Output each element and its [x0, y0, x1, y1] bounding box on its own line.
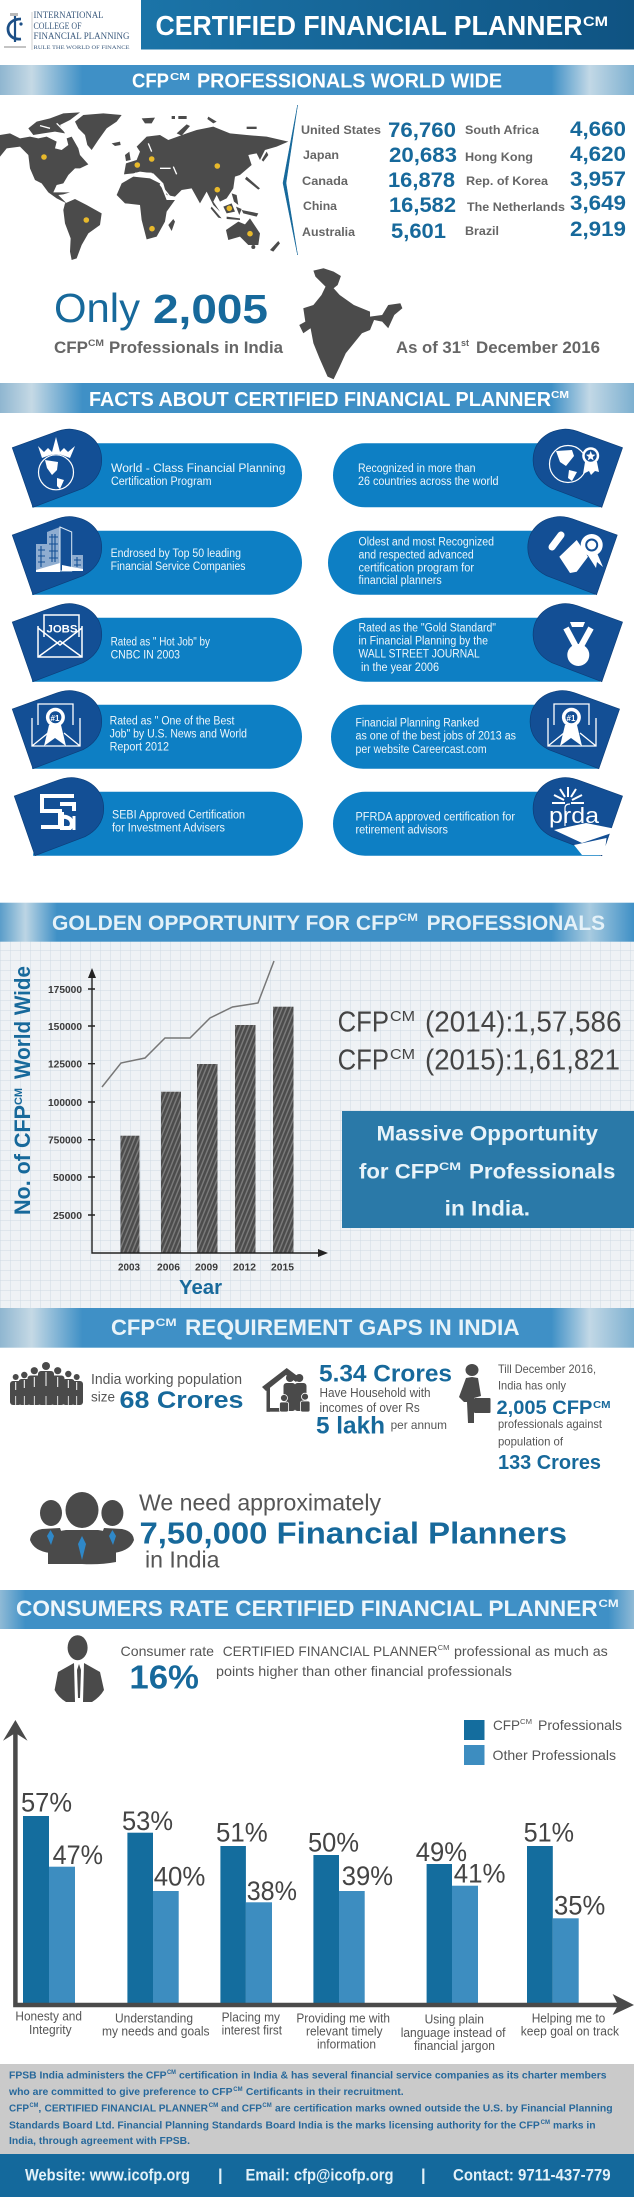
group: keep goal on track: 51%: [524, 1818, 574, 1848]
header banner with title: [141, 0, 634, 50]
stats: CFP counts 2014 and 2015: (2014):1,57,586: [425, 1007, 622, 1039]
x axis year labels: 2003: [118, 1262, 140, 1274]
bar chart: consumer ratings: [3, 1720, 634, 2053]
x axis year labels: [118, 1262, 294, 1274]
fact card: PFRDA approved: retirement advisors: [356, 825, 448, 837]
stat: India has only 2,005: India has only: [498, 1378, 566, 1392]
section heading: facts: [0, 383, 634, 413]
hatched bars: [120, 1007, 294, 1253]
panel: disclaimer text: CFP: [9, 2102, 29, 2114]
stat: household incomes: 5 lakh: [316, 1412, 385, 1439]
fact card: best job US News: [12, 691, 302, 769]
stat: India has only 2,005: 133 Crores: [498, 1452, 601, 1474]
fact card: gold standard: WALL STREET JOURNAL: [358, 649, 480, 661]
category labels: interest first: [222, 2023, 282, 2038]
panel: disclaimer text: CERTIFIED FINANCIAL PLANNER: [44, 2102, 208, 2114]
callout: massive opportunity: for CFP: [359, 1161, 439, 1184]
stat: household incomes: incomes of over Rs: [320, 1401, 420, 1415]
stat: household incomes: [316, 1361, 452, 1439]
left number column: 16,582: [389, 194, 456, 217]
panel: disclaimer text: India, through agreement with FPSB.: [9, 2135, 190, 2147]
fact card: SEBI approved: for Investment Advisers: [112, 823, 225, 835]
icon: envelope with number one rosette: #1: [566, 714, 576, 723]
group: plain language: 49%: [416, 1837, 467, 1867]
right number column: 3,649: [570, 192, 626, 215]
fact card: oldest and most recognized: [328, 517, 617, 595]
icon: envelope with number one rosette: [32, 704, 80, 746]
panel: disclaimer text: [0, 2064, 634, 2154]
left country column: Japan: [303, 148, 339, 162]
section heading: golden opportunity: GOLDEN OPPORTUNITY FOR CFP: [52, 911, 398, 935]
fact card: SEBI approved: [14, 778, 303, 856]
fact card: world class program: [12, 429, 302, 507]
right country column: [465, 123, 565, 238]
right country column: Rep. of Korea: [466, 174, 548, 188]
category labels: Integrity: [29, 2022, 72, 2037]
left country column: China: [303, 199, 337, 213]
icon: group of working people: [10, 1362, 83, 1405]
fact card: PFRDA approved: PFRDA approved certification for: [356, 811, 515, 823]
callout: only 2,005 in India: [54, 285, 600, 357]
left number column: [388, 119, 457, 243]
group: placing interest first: 38%: [247, 1876, 297, 1906]
x axis year labels: 2009: [195, 1262, 218, 1274]
right country column: Brazil: [465, 224, 499, 238]
legend: Professionals: [538, 1717, 622, 1733]
fact card: oldest and most recognized: certification program for: [358, 562, 474, 574]
callout: massive opportunity: CM: [439, 1161, 461, 1173]
y axis tick labels: 50000: [53, 1172, 82, 1184]
section heading: professionals world wide: CFP: [132, 70, 169, 92]
fact card: oldest and most recognized: Oldest and most Recognized: [358, 536, 494, 548]
category labels: Understanding: [115, 2011, 193, 2026]
category labels: relevant timely: [306, 2024, 383, 2039]
stat: India has only 2,005: Till December 2016,: [498, 1362, 596, 1376]
section heading: golden opportunity: PROFESSIONALS: [427, 911, 605, 935]
right number column: [570, 118, 626, 241]
y axis tick labels: 125000: [48, 1058, 82, 1070]
stat: India has only 2,005: population of: [498, 1434, 564, 1448]
legend: [464, 1717, 622, 1765]
y axis tick labels: 750000: [48, 1134, 82, 1146]
header banner with title: CERTIFIED FINANCIAL PLANNER: [156, 10, 583, 41]
section heading: facts: FACTS ABOUT CERTIFIED FINANCIAL PLANNER: [89, 389, 552, 411]
panel: disclaimer text: FPSB India administers the CFP: [9, 2069, 167, 2081]
callout: 7,50,000 financial planners needed: in India: [145, 1546, 220, 1572]
group: placing interest first: [216, 1818, 297, 2003]
callout: 7,50,000 financial planners needed: 7,50,000 Financial Planners: [140, 1515, 567, 1550]
group: understanding needs: [122, 1806, 205, 2003]
callout: massive opportunity: in India.: [445, 1198, 530, 1221]
section heading: golden opportunity: CM: [398, 912, 418, 924]
x axis year labels: 2006: [157, 1262, 180, 1274]
group: keep goal on track: [524, 1818, 605, 2003]
fact card: gold standard: in the year 2006: [361, 662, 439, 674]
fact card: best job US News: Job" by U.S. News and World: [110, 728, 247, 740]
category labels: financial jargon: [414, 2038, 495, 2053]
y axis title: World Wide: [10, 966, 35, 1079]
y axis title: [10, 966, 35, 1215]
x axis year labels: 2012: [233, 1262, 256, 1274]
icon: jobs envelope: JOBS: [46, 624, 78, 636]
stat: household incomes: Have Household with: [320, 1386, 431, 1400]
left country column: United States: [301, 123, 381, 137]
callout: only 2,005 in India: December 2016: [476, 338, 600, 357]
logo: International College of Financial Planning: COLLEGE OF: [34, 22, 82, 32]
legend: Other Professionals: [492, 1747, 616, 1763]
fact card: endorsed by top 50: [12, 517, 302, 595]
callout: only 2,005 in India: st: [461, 338, 469, 348]
footer: contact details: |: [218, 2167, 223, 2185]
section heading: requirement gaps: CM: [156, 1317, 177, 1329]
group: relevant information: 39%: [342, 1861, 393, 1891]
stat: India has only 2,005: professionals against: [498, 1417, 603, 1431]
group: keep goal on track: 35%: [554, 1890, 605, 1920]
y axis tick labels: 150000: [48, 1021, 82, 1033]
section heading: professionals world wide: CM: [170, 71, 190, 83]
section heading: facts: CM: [551, 389, 569, 401]
fact card: best job US News: Report 2012: [110, 742, 169, 754]
logo: International College of Financial Planning: RULE THE WORLD OF FINANCE: [34, 46, 130, 51]
stat: working population: India working population: [91, 1372, 242, 1388]
right country column: The Netherlands: [467, 200, 565, 214]
panel: disclaimer text: ,: [38, 2102, 41, 2114]
section heading: requirement gaps: REQUIREMENT GAPS IN INDIA: [185, 1315, 520, 1340]
fact card: endorsed by top 50: Financial Service Companies: [111, 561, 246, 573]
callout: only 2,005 in India: Only: [54, 285, 140, 331]
left country column: Australia: [302, 225, 355, 239]
y axis tick labels: [48, 984, 82, 1222]
callout: 7,50,000 financial planners needed: [139, 1490, 567, 1572]
panel: disclaimer text: Standards Board Ltd. Financial Planning Standards Board India is the marks licensing authority for the CFP: [9, 2119, 540, 2131]
panel: disclaimer text: CM: [167, 2070, 176, 2076]
fact card: best job US News: Rated as " One of the Best: [110, 715, 235, 727]
group: honesty and integrity: 47%: [53, 1840, 103, 1870]
group: plain language: 41%: [454, 1858, 506, 1888]
callout: only 2,005 in India: CFP: [54, 338, 88, 357]
axes: [15, 1730, 622, 2005]
stat: working population: 68 Crores: [120, 1387, 244, 1414]
fact card: oldest and most recognized: and respected advanced: [358, 549, 474, 561]
fact card: gold standard: in Financial Planning by the: [358, 636, 488, 648]
fact card: SEBI approved: SEBI Approved Certification: [112, 810, 245, 822]
icon: PFRDA logo with graduation cap: [549, 787, 621, 855]
panel: disclaimer text: CM: [262, 2103, 272, 2109]
left number column: 16,878: [388, 169, 455, 192]
footer: contact details: [0, 2154, 634, 2197]
icon: SEBI logo: [41, 796, 74, 830]
footer: contact details: |: [421, 2167, 426, 2185]
section heading: requirement gaps: [0, 1308, 634, 1348]
left number column: 20,683: [389, 144, 457, 167]
stats: CFP counts 2014 and 2015: (2015):1,61,821: [425, 1044, 620, 1076]
category labels: Placing my: [222, 2010, 280, 2025]
callout: only 2,005 in India: Professionals in India: [109, 338, 284, 357]
callout: only 2,005 in India: As of 31: [396, 338, 461, 357]
category labels: Providing me with: [296, 2011, 390, 2026]
stat: household incomes: per annum: [391, 1418, 447, 1432]
panel: disclaimer text: and CFP: [221, 2102, 262, 2114]
right number column: 4,620: [570, 143, 626, 166]
icon: jobs envelope: [38, 615, 82, 657]
left number column: 76,760: [388, 119, 456, 142]
fact card: PFRDA approved: [333, 778, 622, 856]
panel: graph paper background: [0, 941, 634, 1309]
callout: only 2,005 in India: CM: [88, 338, 104, 348]
text: consumer rate 16 percent: 16%: [129, 1658, 199, 1695]
stats: CFP counts 2014 and 2015: CM: [390, 1046, 415, 1063]
x axis year labels: 2015: [271, 1262, 294, 1274]
footer: contact details: Website: www.icofp.org: [25, 2167, 190, 2185]
callout: massive opportunity: [342, 1111, 634, 1228]
fact card: Careercast ranking: [331, 691, 620, 769]
axes: [88, 975, 322, 1253]
y axis title: CM: [13, 1088, 25, 1105]
text: consumer rate 16 percent: CM: [438, 1643, 450, 1652]
group: plain language: [416, 1837, 506, 2003]
section heading: consumers rate: CM: [598, 1598, 619, 1610]
stats: CFP counts 2014 and 2015: CFP: [338, 1044, 389, 1076]
stat: working population: [91, 1372, 244, 1414]
stat: India has only 2,005: 2,005 CFP: [496, 1397, 592, 1419]
logo: International College of Financial Planning: FINANCIAL PLANNING: [34, 32, 130, 42]
legend: CM: [520, 1719, 532, 1726]
left number column: 5,601: [391, 220, 446, 243]
callout: massive opportunity: Professionals: [469, 1161, 616, 1184]
left country column: [301, 123, 381, 239]
icon: medal: [566, 622, 591, 666]
icon: PFRDA logo with graduation cap: prda: [549, 803, 600, 828]
text: consumer rate 16 percent: points higher than other financial professionals: [216, 1663, 512, 1679]
legend: CFP: [493, 1717, 520, 1733]
section heading: professionals world wide: [0, 65, 634, 95]
y axis tick labels: 175000: [48, 984, 82, 996]
panel: disclaimer text: certification in India & has several financial service companies as its charter members: [179, 2069, 607, 2081]
bar chart: CFP professionals world wide: Year: [179, 1277, 222, 1299]
icon: envelope with number one rosette: [548, 704, 596, 746]
callout: massive opportunity: Massive Opportunity: [376, 1123, 598, 1146]
panel: disclaimer text: marks in: [553, 2119, 596, 2131]
category labels: my needs and goals: [102, 2024, 210, 2039]
section heading: requirement gaps: CFP: [111, 1315, 155, 1340]
text: consumer rate 16 percent: [120, 1643, 608, 1695]
y axis tick labels: 25000: [53, 1210, 82, 1222]
header banner with title: CM: [583, 13, 608, 29]
right number column: 2,919: [570, 218, 626, 241]
panel: disclaimer text: CM: [541, 2120, 550, 2126]
trend line: [102, 961, 274, 1087]
group: honesty and integrity: [21, 1788, 103, 2003]
category labels: language instead of: [401, 2025, 506, 2040]
panel: disclaimer text: Certificants in their recruitment.: [246, 2086, 404, 2098]
right country column: Hong Kong: [465, 150, 533, 164]
fact card: hot job: [12, 604, 302, 682]
group: relevant information: 50%: [308, 1828, 359, 1858]
panel: disclaimer text: are certification marks owned outside the U.S. by Financial Planning: [275, 2102, 613, 2114]
stats: CFP counts 2014 and 2015: CFP: [338, 1007, 389, 1039]
text: consumer rate 16 percent: Consumer rate: [120, 1643, 214, 1659]
right country column: South Africa: [465, 123, 539, 137]
icon: three business people: [30, 1492, 134, 1564]
section heading: consumers rate: [0, 1590, 634, 1629]
right number column: 3,957: [570, 168, 626, 191]
fact card: Careercast ranking: as one of the best jobs of 2013 as: [356, 731, 516, 743]
icon: crown over globe: [38, 437, 75, 490]
fact card: hot job: CNBC IN 2003: [111, 650, 180, 662]
icon: office buildings: [36, 527, 83, 572]
group: placing interest first: 51%: [216, 1818, 268, 1848]
panel: disclaimer text: who are committed to give preference to CFP: [8, 2086, 232, 2098]
right number column: 4,660: [570, 118, 626, 141]
fact card: endorsed by top 50: Endrosed by Top 50 leading: [111, 548, 241, 560]
icon: envelope with number one rosette: #1: [50, 714, 60, 723]
icon: businessman: [55, 1635, 104, 1702]
curved divider: [283, 105, 298, 255]
group: relevant information: [308, 1828, 393, 2003]
text: consumer rate 16 percent: CERTIFIED FINANCIAL PLANNER: [223, 1643, 438, 1659]
world map with location dots: [0, 112, 288, 260]
panel: disclaimer text: CM: [209, 2103, 218, 2109]
section heading: golden opportunity: [0, 903, 634, 942]
fact card: hot job: Rated as " Hot Job" by: [111, 637, 210, 649]
footer: contact details: Contact: 9711-437-779: [453, 2167, 611, 2185]
category labels: Honesty and: [15, 2009, 82, 2024]
fact card: recognized in 26 countries: [333, 429, 622, 507]
category labels: keep goal on track: [521, 2024, 619, 2039]
fact card: world class program: Certification Program: [111, 476, 212, 488]
panel: disclaimer text: CM: [30, 2103, 38, 2109]
logo: International College of Financial Planning: [4, 11, 130, 51]
fact card: recognized in 26 countries: 26 countries across the world: [358, 476, 498, 488]
icon: household family: [262, 1368, 310, 1412]
left country column: Canada: [302, 174, 348, 188]
icon: man with briefcase: [459, 1364, 490, 1423]
footer: contact details: Email: cfp@icofp.org: [246, 2167, 394, 2185]
fact card: gold standard: [333, 604, 622, 682]
y axis title: No. of CFP: [10, 1105, 35, 1215]
bar chart: CFP professionals world wide: [10, 961, 328, 1299]
fact card: oldest and most recognized: financial planners: [358, 575, 442, 587]
panel: disclaimer text: CM: [233, 2087, 243, 2093]
category labels: Using plain: [425, 2012, 484, 2027]
category labels: information: [317, 2037, 376, 2052]
section heading: professionals world wide: PROFESSIONALS WORLD WIDE: [197, 70, 502, 92]
fact card: gold standard: Rated as the "Gold Standard": [358, 623, 496, 635]
callout: only 2,005 in India: 2,005: [153, 286, 268, 332]
category labels: Helping me to: [532, 2011, 605, 2026]
stat: India has only 2,005: [496, 1362, 611, 1474]
group: honesty and integrity: 57%: [21, 1788, 72, 1818]
India map: [299, 268, 402, 379]
text: consumer rate 16 percent: professional as much as: [454, 1643, 608, 1659]
stats: CFP counts 2014 and 2015: [338, 1007, 622, 1076]
y axis tick labels: 100000: [48, 1097, 82, 1109]
group: understanding needs: 40%: [154, 1862, 205, 1892]
category labels: [15, 2009, 619, 2053]
stat: India has only 2,005: CM: [593, 1400, 611, 1411]
fact card: world class program: World - Class Financial Planning: [111, 463, 286, 475]
fact card: Careercast ranking: Financial Planning Ranked: [356, 718, 479, 730]
table: professionals by country: [301, 118, 626, 243]
fact card: Careercast ranking: per website Careercast.com: [356, 744, 487, 756]
stat: working population: size: [91, 1389, 115, 1405]
callout: 7,50,000 financial planners needed: We need approximately: [139, 1490, 381, 1516]
fact card: recognized in 26 countries: Recognized in more than: [358, 463, 476, 475]
icon: globe with rosette: [550, 446, 599, 482]
group: understanding needs: 53%: [122, 1806, 173, 1836]
section heading: consumers rate: CONSUMERS RATE CERTIFIED FINANCIAL PLANNER: [16, 1596, 598, 1621]
icon: handshake with rosette: [552, 534, 603, 573]
stats: CFP counts 2014 and 2015: CM: [390, 1008, 415, 1025]
stat: household incomes: 5.34 Crores: [319, 1361, 452, 1388]
logo: International College of Financial Planning: INTERNATIONAL: [34, 11, 104, 21]
